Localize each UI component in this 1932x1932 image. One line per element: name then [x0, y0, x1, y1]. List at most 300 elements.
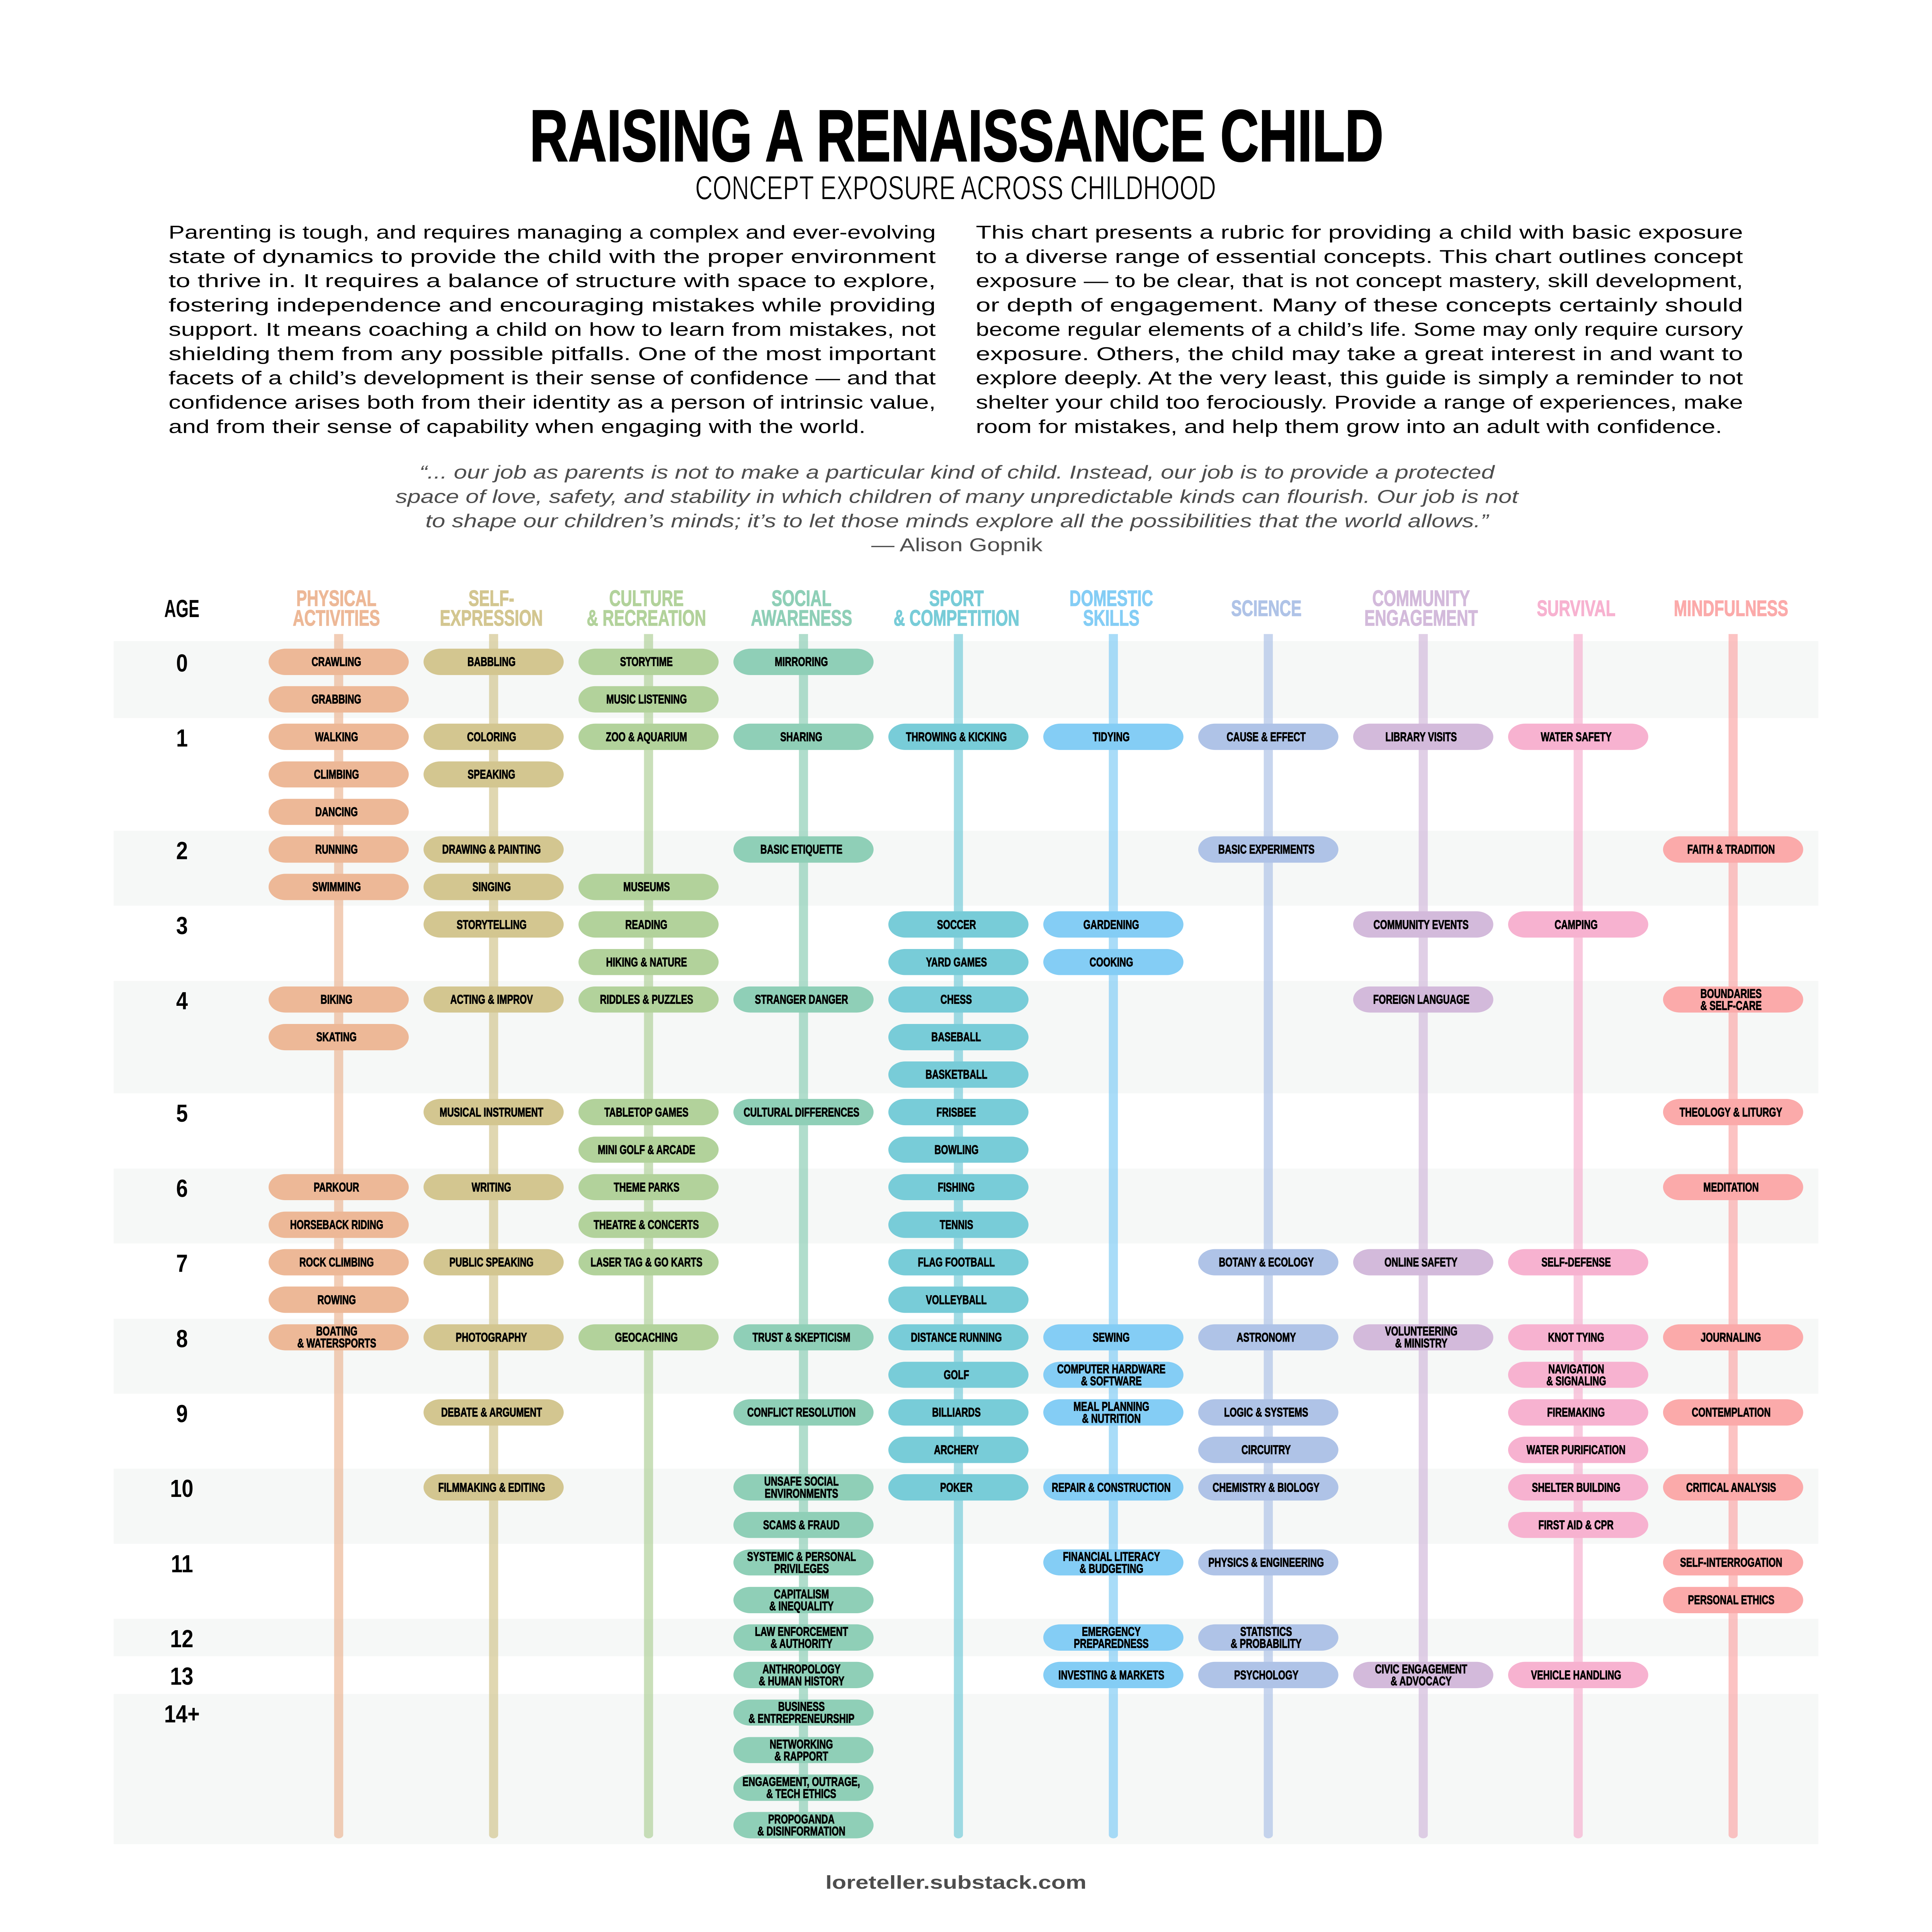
pill: propoganda and disinformation: PROPOGANDA — [768, 1812, 835, 1826]
pill: firemaking: FIREMAKING — [1547, 1405, 1605, 1420]
pill: speaking — [423, 761, 564, 787]
header: community engagement: ENGAGEMENT — [1364, 605, 1478, 631]
pill: bowling — [888, 1136, 1029, 1163]
age 2: 2 — [176, 837, 188, 864]
pill: capitalism and inequality: CAPITALISM — [774, 1587, 829, 1601]
pill: running — [269, 836, 409, 862]
pill: chemistry and biology: CHEMISTRY & BIOLOGY — [1213, 1481, 1320, 1495]
pill: systemic and personal privileges: SYSTEMIC & PERSONAL — [747, 1549, 856, 1564]
pill: psychology: PSYCHOLOGY — [1234, 1668, 1298, 1682]
age 9: 9 — [176, 1400, 188, 1427]
pill: personal ethics — [1663, 1587, 1803, 1613]
pill: unsafe social environments: UNSAFE SOCIAL — [764, 1475, 838, 1488]
age 6: 6 — [176, 1175, 188, 1202]
pill: boundaries and self-care — [1663, 986, 1803, 1013]
pill: swimming: SWIMMING — [312, 880, 361, 894]
pill: conflict resolution: CONFLICT RESOLUTION — [747, 1405, 855, 1420]
pill: emergency preparedness — [1043, 1624, 1184, 1651]
pill: computer hardware and software — [1043, 1362, 1184, 1388]
pill: self-defense: SELF-DEFENSE — [1541, 1255, 1611, 1269]
pill: business and entrepreneurship: & ENTREPRENEURSHIP — [748, 1712, 854, 1726]
text block: right intro paragraph: room for mistakes, and help them grow into an adult with confidence. — [976, 416, 1722, 437]
pill: statistics and probability: & PROBABILITY — [1231, 1637, 1302, 1651]
pill: critical analysis: CRITICAL ANALYSIS — [1686, 1481, 1776, 1495]
pill: meal planning and nutrition: & NUTRITION — [1082, 1412, 1141, 1425]
pill: camping — [1508, 912, 1648, 937]
pill: rock climbing — [269, 1249, 409, 1276]
pill: mirroring: MIRRORING — [775, 655, 828, 669]
pill: financial literacy and budgeting — [1043, 1549, 1184, 1575]
pill: billiards — [888, 1399, 1029, 1425]
pill: tidying — [1043, 724, 1184, 750]
text block: left intro paragraph: facets of a child’s development is their sense of confidence — and that — [168, 367, 936, 388]
pill: self-interrogation — [1663, 1549, 1803, 1575]
pill: debate and argument: DEBATE & ARGUMENT — [441, 1405, 542, 1420]
pill: photography: PHOTOGRAPHY — [456, 1330, 527, 1344]
pill: unsafe social environments — [733, 1474, 874, 1500]
pill: hiking and nature: HIKING & NATURE — [606, 955, 687, 969]
header: community engagement — [1344, 594, 1498, 623]
pill: basketball — [888, 1061, 1029, 1088]
pill: poker: POKER — [940, 1481, 973, 1495]
age 1: 1 — [176, 724, 188, 752]
pill: propoganda and disinformation — [733, 1812, 874, 1838]
pill: statistics and probability: STATISTICS — [1240, 1624, 1292, 1639]
pill: emergency preparedness: EMERGENCY — [1082, 1624, 1141, 1639]
pill: speaking: SPEAKING — [468, 767, 515, 782]
pill: singing: SINGING — [472, 880, 511, 894]
pill: dancing: DANCING — [315, 805, 358, 819]
pill: theatre and concerts — [578, 1212, 719, 1238]
pill: billiards: BILLIARDS — [932, 1405, 981, 1420]
pill: online safety: ONLINE SAFETY — [1385, 1255, 1458, 1269]
text block: left intro paragraph: state of dynamics to provide the child with the proper environment — [168, 246, 936, 267]
pill: yard games — [888, 949, 1029, 975]
pill: unsafe social environments: ENVIRONMENTS — [765, 1486, 838, 1500]
pill: cooking: COOKING — [1090, 955, 1133, 969]
pill: rock climbing: ROCK CLIMBING — [299, 1255, 374, 1269]
pill: shelter building: SHELTER BUILDING — [1532, 1481, 1620, 1495]
pill: meal planning and nutrition: MEAL PLANNING — [1073, 1400, 1149, 1413]
pill: tennis: TENNIS — [940, 1218, 973, 1232]
pill: climbing: CLIMBING — [314, 767, 359, 782]
pill: cause and effect: CAUSE & EFFECT — [1227, 730, 1306, 744]
pill: storytime: STORYTIME — [620, 655, 673, 669]
pill: biking — [269, 986, 409, 1013]
age 11: 11 — [171, 1550, 193, 1577]
pill: boating and watersports: & WATERSPORTS — [297, 1337, 376, 1350]
pill: throwing and kicking — [888, 724, 1029, 750]
pill: debate and argument — [423, 1399, 564, 1425]
quote: “... our job as parents is not to make a particular kind of child. Instead, our job is to provide a protected — [419, 462, 1495, 483]
pill: scams and fraud — [733, 1512, 874, 1538]
pill: chess: CHESS — [940, 993, 972, 1007]
pill: first aid and cpr: FIRST AID & CPR — [1539, 1518, 1614, 1532]
pill: reading — [578, 912, 719, 937]
subtitle: CONCEPT EXPOSURE ACROSS CHILDHOOD — [695, 169, 1216, 207]
text block: right intro paragraph: exposure — to be clear, that is not concept mastery, skill development, — [976, 270, 1743, 291]
pill: horseback riding: HORSEBACK RIDING — [290, 1218, 383, 1232]
pill: sharing — [733, 724, 874, 750]
pill: repair and construction — [1043, 1474, 1184, 1500]
pill: riddles and puzzles — [578, 986, 719, 1013]
text block: right intro paragraph: This chart presents a rubric for providing a child with basic exposure — [976, 221, 1743, 243]
pill: volleyball: VOLLEYBALL — [926, 1293, 987, 1307]
header: social awareness — [724, 594, 879, 623]
pill: camping: CAMPING — [1554, 918, 1598, 932]
pill: climbing — [269, 761, 409, 787]
pill: navigation and signaling: NAVIGATION — [1548, 1362, 1604, 1376]
pill: hiking and nature — [578, 949, 719, 975]
pill: library visits — [1353, 724, 1493, 750]
pill: engagement, outrage and tech ethics: & TECH ETHICS — [767, 1787, 837, 1801]
pill: engagement, outrage and tech ethics: ENGAGEMENT, OUTRAGE, — [743, 1775, 860, 1789]
pill: systemic and personal privileges: PRIVILEGES — [774, 1561, 829, 1576]
pill: financial literacy and budgeting: & BUDGETING — [1079, 1561, 1143, 1576]
text block: right intro paragraph: shelter your child too ferociously. Provide a range of experiences, make — [976, 391, 1743, 413]
pill: sewing — [1043, 1324, 1184, 1350]
pill: flag football: FLAG FOOTBALL — [918, 1255, 995, 1269]
pill: volunteering and ministry — [1353, 1324, 1493, 1350]
pill: sharing: SHARING — [781, 730, 822, 744]
pill: soccer: SOCCER — [937, 918, 976, 932]
pill: community events — [1353, 912, 1493, 937]
pill: tabletop games — [578, 1099, 719, 1125]
age 0: 0 — [176, 649, 188, 677]
header: survival: SURVIVAL — [1537, 596, 1616, 621]
header: culture and recreation: CULTURE — [609, 586, 684, 611]
pill: boundaries and self-care: & SELF-CARE — [1701, 999, 1762, 1013]
pill: civic engagement and advocacy: & ADVOCACY — [1391, 1674, 1452, 1688]
pill: zoo and aquarium — [578, 724, 719, 750]
pill: cause and effect — [1198, 724, 1338, 750]
header: sport and competition: SPORT — [929, 586, 984, 611]
pill: storytelling — [423, 912, 564, 937]
text block: left intro paragraph: Parenting is tough, and requires managing a complex and ever-evolving — [168, 221, 936, 243]
pill: logic and systems — [1198, 1399, 1338, 1425]
pill: laser tag and go karts: LASER TAG & GO KARTS — [590, 1255, 702, 1269]
pill: faith and tradition — [1663, 836, 1803, 862]
pill: self-defense — [1508, 1249, 1648, 1276]
pill: coloring: COLORING — [467, 730, 516, 744]
pill: dancing — [269, 799, 409, 825]
pill: gardening — [1043, 912, 1184, 937]
pill: emergency preparedness: PREPAREDNESS — [1074, 1637, 1149, 1651]
pill: walking — [269, 724, 409, 750]
text block: left intro paragraph: fostering independence and encouraging mistakes while providing — [168, 294, 936, 315]
pill: volunteering and ministry: VOLUNTEERING — [1385, 1325, 1458, 1338]
pill: conflict resolution — [733, 1399, 874, 1425]
pill: zoo and aquarium: ZOO & AQUARIUM — [606, 730, 687, 744]
pill: basic experiments — [1198, 836, 1338, 862]
pill: chess — [888, 986, 1029, 1013]
pill: psychology — [1198, 1662, 1338, 1688]
age 14+: 14+ — [164, 1700, 200, 1728]
pill: fishing: FISHING — [938, 1180, 975, 1194]
pill: journaling: JOURNALING — [1701, 1330, 1761, 1344]
pill: musical instrument: MUSICAL INSTRUMENT — [440, 1105, 543, 1119]
pill: yard games: YARD GAMES — [926, 955, 987, 969]
header: culture and recreation — [569, 594, 724, 623]
pill: physics and engineering — [1198, 1549, 1338, 1575]
pill: anthropology and human history: & HUMAN HISTORY — [759, 1674, 844, 1688]
pill: engagement, outrage and tech ethics — [733, 1774, 874, 1801]
pill: sewing: SEWING — [1093, 1330, 1130, 1344]
pill: navigation and signaling — [1508, 1362, 1648, 1388]
text block: right intro paragraph: explore deeply. At the very least, this guide is simply a reminder to not — [976, 367, 1743, 388]
quote — [396, 462, 1519, 555]
pill: mirroring — [733, 649, 874, 675]
pill: meditation — [1663, 1174, 1803, 1200]
age 10: 10 — [170, 1475, 194, 1502]
pill: babbling: BABBLING — [468, 655, 515, 669]
pill: parkour — [269, 1174, 409, 1200]
pill: circuitry — [1198, 1437, 1338, 1463]
pill: babbling — [423, 649, 564, 675]
pill: theatre and concerts: THEATRE & CONCERTS — [594, 1218, 699, 1232]
pill: photography — [423, 1324, 564, 1350]
pill: geocaching — [578, 1324, 719, 1350]
quote: space of love, safety, and stability in which children of many unpredictable kinds can flourish. Our job is not — [396, 486, 1519, 507]
pill: circuitry: CIRCUITRY — [1242, 1443, 1291, 1457]
pill: water safety — [1508, 724, 1648, 750]
text block: left intro paragraph: to thrive in. It requires a balance of structure with space to explore, — [168, 270, 936, 291]
pill: storytime — [578, 649, 719, 675]
pill: laser tag and go karts — [578, 1249, 719, 1276]
pill: logic and systems: LOGIC & SYSTEMS — [1224, 1405, 1308, 1420]
pill: networking and rapport: NETWORKING — [770, 1737, 833, 1751]
pill: crawling: CRAWLING — [312, 655, 361, 669]
pill: distance running — [888, 1324, 1029, 1350]
pill: tabletop games: TABLETOP GAMES — [604, 1105, 689, 1119]
pill: musical instrument — [423, 1099, 564, 1125]
pill: investing and markets: INVESTING & MARKETS — [1058, 1668, 1164, 1682]
pill: boating and watersports — [269, 1324, 409, 1350]
pill: contemplation — [1663, 1399, 1803, 1425]
pill: grabbing — [269, 686, 409, 713]
pill: filmmaking and editing — [423, 1474, 564, 1500]
pill: water purification: WATER PURIFICATION — [1527, 1443, 1626, 1457]
pill: capitalism and inequality — [733, 1587, 874, 1613]
pill: contemplation: CONTEMPLATION — [1692, 1405, 1770, 1420]
pill: throwing and kicking: THROWING & KICKING — [906, 730, 1007, 744]
pill: critical analysis — [1663, 1474, 1803, 1500]
pill: volunteering and ministry: & MINISTRY — [1395, 1337, 1447, 1350]
text block: left intro paragraph: confidence arises both from their identity as a person of intrinsic value, — [168, 391, 936, 413]
pill: horseback riding — [269, 1212, 409, 1238]
text block: right intro paragraph: become regular elements of a child’s life. Some may only require cursory — [976, 319, 1743, 340]
header: physical activities: ACTIVITIES — [293, 605, 380, 631]
pill: foreign language — [1353, 986, 1493, 1013]
pill: networking and rapport: & RAPPORT — [774, 1749, 828, 1763]
pill: skating — [269, 1024, 409, 1050]
text block: left intro paragraph: shielding them from any possible pitfalls. One of the most important — [168, 343, 936, 364]
pill: boundaries and self-care: BOUNDARIES — [1701, 986, 1762, 1001]
pill: golf: GOLF — [944, 1368, 969, 1382]
pill: distance running: DISTANCE RUNNING — [911, 1330, 1002, 1344]
pill: self-interrogation: SELF-INTERROGATION — [1680, 1556, 1782, 1570]
pill: repair and construction: REPAIR & CONSTRUCTION — [1052, 1481, 1171, 1495]
pill: basic etiquette — [733, 836, 874, 862]
pill: capitalism and inequality: & INEQUALITY — [769, 1599, 833, 1613]
pill: journaling — [1663, 1324, 1803, 1350]
header: domestic skills: SKILLS — [1083, 605, 1139, 631]
pill: law enforcement and authority — [733, 1624, 874, 1651]
pill: basketball: BASKETBALL — [925, 1068, 987, 1082]
header: self-expression: EXPRESSION — [440, 605, 543, 631]
text block: right intro paragraph: or depth of engagement. Many of these concepts certainly should — [976, 294, 1743, 315]
pill: foreign language: FOREIGN LANGUAGE — [1373, 993, 1469, 1007]
pill: personal ethics: PERSONAL ETHICS — [1688, 1593, 1774, 1607]
pill: gardening: GARDENING — [1083, 918, 1139, 932]
pill: drawing and painting — [423, 836, 564, 862]
age 5: 5 — [176, 1100, 188, 1127]
pill: networking and rapport — [733, 1737, 874, 1763]
header: social awareness: SOCIAL — [772, 586, 831, 611]
pill: poker — [888, 1474, 1029, 1500]
pill: mini golf and arcade: MINI GOLF & ARCADE — [598, 1143, 695, 1157]
pill: business and entrepreneurship: BUSINESS — [778, 1700, 825, 1714]
text block: right intro paragraph — [976, 221, 1743, 437]
pill: storytelling: STORYTELLING — [457, 918, 527, 932]
pill: water purification — [1508, 1437, 1648, 1463]
pill: cultural differences — [733, 1099, 874, 1125]
header: sport and competition — [879, 594, 1034, 623]
pill: library visits: LIBRARY VISITS — [1385, 730, 1457, 744]
pill: law enforcement and authority: LAW ENFORCEMENT — [755, 1624, 848, 1639]
pill: drawing and painting: DRAWING & PAINTING — [442, 842, 541, 857]
header: community engagement: COMMUNITY — [1372, 586, 1470, 611]
pill: astronomy — [1198, 1324, 1338, 1350]
pill: shelter building — [1508, 1474, 1648, 1500]
pill: skating: SKATING — [316, 1030, 357, 1044]
pill: trust and skepticism — [733, 1324, 874, 1350]
pill: rowing: ROWING — [317, 1293, 356, 1307]
header: sport and competition: & COMPETITION — [893, 605, 1019, 631]
pill: civic engagement and advocacy — [1353, 1662, 1493, 1688]
pill: scams and fraud: SCAMS & FRAUD — [763, 1518, 840, 1532]
pill: financial literacy and budgeting: FINANCIAL LITERACY — [1063, 1549, 1160, 1564]
pill: swimming — [269, 874, 409, 900]
pill: stranger danger — [733, 986, 874, 1013]
pill: botany and ecology — [1198, 1249, 1338, 1276]
pill: computer hardware and software: COMPUTER HARDWARE — [1057, 1362, 1165, 1376]
pill: statistics and probability — [1198, 1624, 1338, 1651]
text block: right intro paragraph: to a diverse range of essential concepts. This chart outlines concept — [976, 246, 1743, 267]
pill: tennis — [888, 1212, 1029, 1238]
pill: propoganda and disinformation: & DISINFORMATION — [757, 1824, 845, 1838]
age 12: 12 — [170, 1625, 194, 1653]
pill: trust and skepticism: TRUST & SKEPTICISM — [752, 1330, 850, 1344]
pill: first aid and cpr — [1508, 1512, 1648, 1538]
pill: stranger danger: STRANGER DANGER — [755, 993, 848, 1007]
pill: cooking — [1043, 949, 1184, 975]
pill: filmmaking and editing: FILMMAKING & EDITING — [438, 1481, 545, 1495]
pill: faith and tradition: FAITH & TRADITION — [1687, 842, 1775, 857]
header: physical activities: PHYSICAL — [296, 586, 377, 611]
pill: soccer — [888, 912, 1029, 937]
pill: systemic and personal privileges — [733, 1549, 874, 1575]
quote: to shape our children’s minds; it’s to let those minds explore all the possibilities that the world allows.” — [425, 510, 1490, 531]
pill: online safety — [1353, 1249, 1493, 1276]
pill: mini golf and arcade — [578, 1136, 719, 1163]
pill: business and entrepreneurship — [733, 1699, 874, 1726]
pill: reading: READING — [626, 918, 667, 932]
pill: rowing — [269, 1287, 409, 1313]
pill: navigation and signaling: & SIGNALING — [1546, 1374, 1606, 1388]
pill: baseball: BASEBALL — [932, 1030, 981, 1044]
pill: crawling — [269, 649, 409, 675]
pill: walking: WALKING — [315, 730, 358, 744]
header: mindfulness: MINDFULNESS — [1674, 596, 1788, 621]
header: self-expression — [414, 594, 569, 623]
pill: archery — [888, 1437, 1029, 1463]
age 8: 8 — [176, 1325, 188, 1352]
pill: biking: BIKING — [321, 993, 352, 1007]
text block: right intro paragraph: exposure. Others, the child may take a great interest in and want to — [976, 343, 1743, 364]
pill: museums: MUSEUMS — [623, 880, 670, 894]
pill: fishing — [888, 1174, 1029, 1200]
pill: cultural differences: CULTURAL DIFFERENCES — [743, 1105, 859, 1119]
age 4: 4 — [176, 987, 188, 1015]
header: domestic skills: DOMESTIC — [1070, 586, 1153, 611]
pill: basic etiquette: BASIC ETIQUETTE — [760, 842, 842, 857]
pill: acting and improv: ACTING & IMPROV — [450, 993, 533, 1007]
pill: firemaking — [1508, 1399, 1648, 1425]
header: physical activities — [259, 594, 414, 623]
text block: left intro paragraph: and from their sense of capability when engaging with the world. — [168, 416, 866, 437]
age 3: 3 — [176, 912, 188, 939]
pill: riddles and puzzles: RIDDLES & PUZZLES — [600, 993, 693, 1007]
pill: tidying: TIDYING — [1093, 730, 1130, 744]
pill: acting and improv — [423, 986, 564, 1013]
pill: running: RUNNING — [315, 842, 358, 857]
pill: anthropology and human history: ANTHROPOLOGY — [762, 1662, 840, 1676]
header: culture and recreation: & RECREATION — [587, 605, 706, 631]
pill: coloring — [423, 724, 564, 750]
footer url: loreteller.substack.com — [825, 1872, 1087, 1893]
pill: chemistry and biology — [1198, 1474, 1338, 1500]
pill: knot tying — [1508, 1324, 1648, 1350]
pill: bowling: BOWLING — [934, 1143, 978, 1157]
header: science: SCIENCE — [1231, 596, 1301, 621]
pill: museums — [578, 874, 719, 900]
text block: left intro paragraph: support. It means coaching a child on how to learn from mistakes, not — [168, 319, 936, 340]
pill: meal planning and nutrition — [1043, 1399, 1184, 1425]
quote: — Alison Gopnik — [871, 534, 1043, 555]
pill: vehicle handling: VEHICLE HANDLING — [1531, 1668, 1621, 1682]
pill: meditation: MEDITATION — [1703, 1180, 1759, 1194]
header: self-expression: SELF- — [469, 586, 514, 611]
pill: baseball — [888, 1024, 1029, 1050]
pill: investing and markets — [1043, 1662, 1184, 1688]
age 13: 13 — [170, 1663, 194, 1690]
pill: grabbing: GRABBING — [312, 692, 361, 706]
pill: frisbee — [888, 1099, 1029, 1125]
pill: music listening — [578, 686, 719, 713]
pill: flag football — [888, 1249, 1029, 1276]
pill: community events: COMMUNITY EVENTS — [1374, 918, 1469, 932]
pill: parkour: PARKOUR — [314, 1180, 359, 1194]
pill: geocaching: GEOCACHING — [615, 1330, 678, 1344]
age 7: 7 — [176, 1250, 188, 1277]
pill: theology and liturgy — [1663, 1099, 1803, 1125]
pill: writing: WRITING — [472, 1180, 511, 1194]
pill: law enforcement and authority: & AUTHORITY — [770, 1637, 832, 1651]
pill: frisbee: FRISBEE — [937, 1105, 976, 1119]
pill: anthropology and human history — [733, 1662, 874, 1688]
header: age: AGE — [164, 595, 199, 622]
